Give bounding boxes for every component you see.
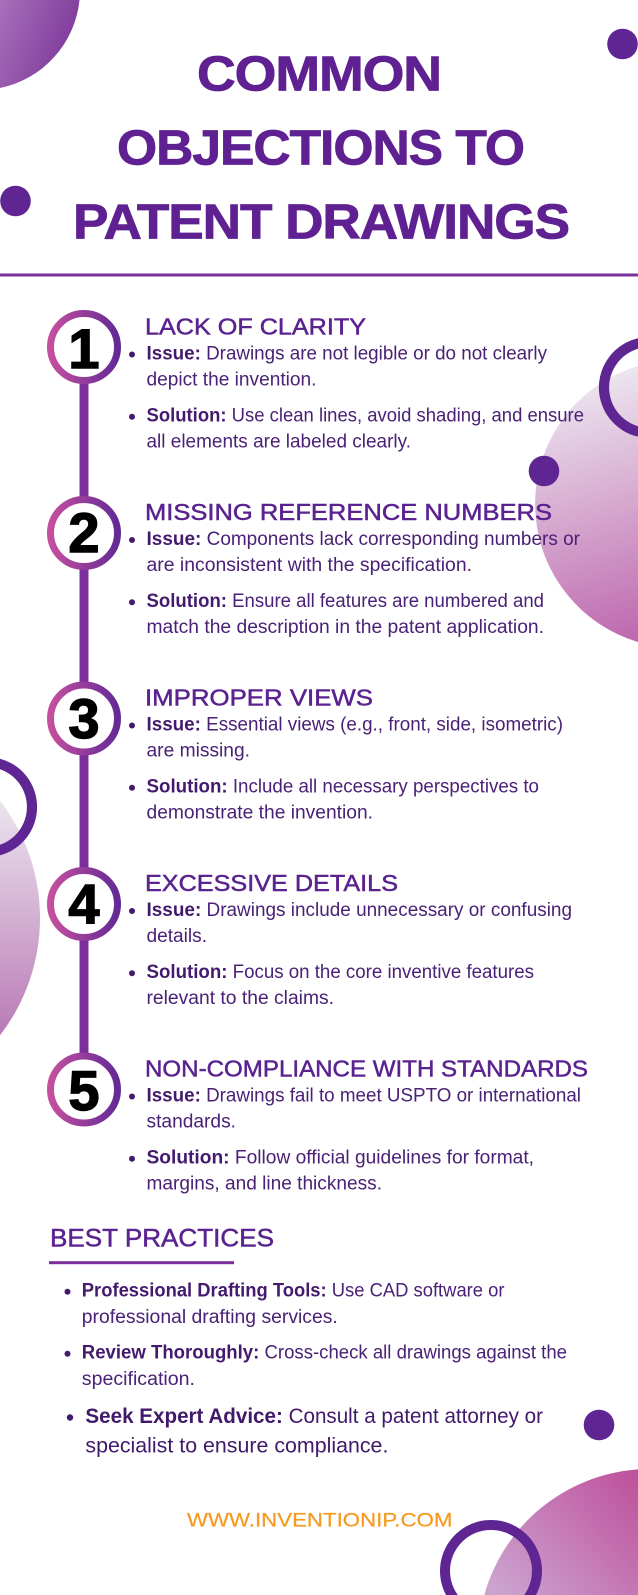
section 5: non-compliance with standards: NON-COMPLIANCE WITH STANDARDS xyxy=(145,1055,588,1081)
section 1: lack of clarity xyxy=(129,313,584,453)
title: COMMON xyxy=(197,46,441,102)
best practices heading xyxy=(49,1225,274,1264)
step 4 marker: 4 xyxy=(68,872,100,936)
section 1: lack of clarity: LACK OF CLARITY xyxy=(145,313,366,339)
website url: WWW.INVENTIONIP.COM xyxy=(187,1510,452,1532)
step 1 marker: 1 xyxy=(68,317,100,380)
section 4: excessive details: details. xyxy=(146,926,207,947)
decorative ring: left xyxy=(0,759,37,855)
section 5: non-compliance with standards: Solution: Follow official guidelines for format, xyxy=(146,1148,534,1169)
section 3: improper views: Issue: Essential views (e.g., front, side, isometric) xyxy=(146,714,563,736)
section 2: missing reference numbers: Solution: Ensure all features are numbered and xyxy=(146,591,544,612)
title: PATENT DRAWINGS xyxy=(73,194,569,250)
section 4: excessive details: Solution: Focus on the core inventive features xyxy=(146,962,534,983)
section 4: excessive details: relevant to the claims. xyxy=(146,988,334,1009)
section 1: lack of clarity: Solution: Use clean lines, avoid shading, and ensure xyxy=(146,406,584,427)
decorative dot: left of title xyxy=(0,186,31,216)
best practices list xyxy=(64,1281,567,1458)
section 5: non-compliance with standards: margins, and line thickness. xyxy=(146,1174,382,1195)
step 3 marker xyxy=(50,685,118,752)
decorative dot: bottom right xyxy=(584,1410,614,1440)
section 4: excessive details: EXCESSIVE DETAILS xyxy=(145,870,398,896)
decorative circle: top left xyxy=(0,0,80,88)
decorative circle: right large xyxy=(535,366,638,642)
section 5: non-compliance with standards xyxy=(129,1055,588,1195)
step 4 marker xyxy=(50,870,118,938)
title xyxy=(73,46,569,250)
section 1: lack of clarity: Issue: Drawings are not legible or do not clearly xyxy=(146,344,547,364)
section 3: improper views: demonstrate the invention. xyxy=(146,803,373,824)
section 5: non-compliance with standards: standards. xyxy=(146,1112,236,1133)
decorative dot: top right xyxy=(607,29,638,59)
section 3: improper views: are missing. xyxy=(146,741,250,762)
step 2 marker xyxy=(50,500,118,566)
decorative dot: right middle xyxy=(529,456,559,486)
best practices list: Review Thoroughly: Cross-check all drawings against the xyxy=(82,1343,567,1364)
decorative ring: bottom xyxy=(440,1520,542,1595)
section 1: lack of clarity: depict the invention. xyxy=(146,370,316,391)
section 3: improper views: Solution: Include all necessary perspectives to xyxy=(146,777,539,798)
section 1: lack of clarity: all elements are labeled clearly. xyxy=(146,432,411,453)
timeline connector xyxy=(80,347,88,1089)
best practices list: specialist to ensure compliance. xyxy=(85,1435,388,1458)
step 1 marker xyxy=(50,314,118,380)
section 2: missing reference numbers: match the description in the patent application. xyxy=(146,617,544,638)
best practices list: specification. xyxy=(82,1369,195,1390)
section 2: missing reference numbers: are inconsistent with the specification. xyxy=(146,555,472,576)
section 3: improper views xyxy=(129,684,563,824)
section 2: missing reference numbers: MISSING REFERENCE NUMBERS xyxy=(145,499,552,525)
section 3: improper views: IMPROPER VIEWS xyxy=(145,684,373,710)
decorative ring: right xyxy=(599,338,638,437)
decorative circle: left large xyxy=(0,801,40,1035)
section 2: missing reference numbers xyxy=(129,499,581,638)
section 4: excessive details: Issue: Drawings include unnecessary or confusing xyxy=(146,900,572,921)
step 5 marker xyxy=(50,1056,118,1123)
step 5 marker: 5 xyxy=(68,1059,100,1122)
section 4: excessive details xyxy=(129,870,572,1009)
best practices heading: BEST PRACTICES xyxy=(50,1225,274,1253)
best practices list: Professional Drafting Tools: Use CAD software or xyxy=(82,1281,505,1302)
decorative circle: bottom right large xyxy=(484,1469,638,1595)
best practices list: Seek Expert Advice: Consult a patent attorney or xyxy=(85,1405,543,1428)
section 5: non-compliance with standards: Issue: Drawings fail to meet USPTO or international xyxy=(146,1086,581,1106)
best practices list: professional drafting services. xyxy=(82,1307,338,1328)
title: OBJECTIONS TO xyxy=(117,120,524,176)
step 2 marker: 2 xyxy=(68,501,100,564)
section 2: missing reference numbers: Issue: Components lack corresponding numbers or xyxy=(146,529,581,550)
step 3 marker: 3 xyxy=(68,687,100,750)
